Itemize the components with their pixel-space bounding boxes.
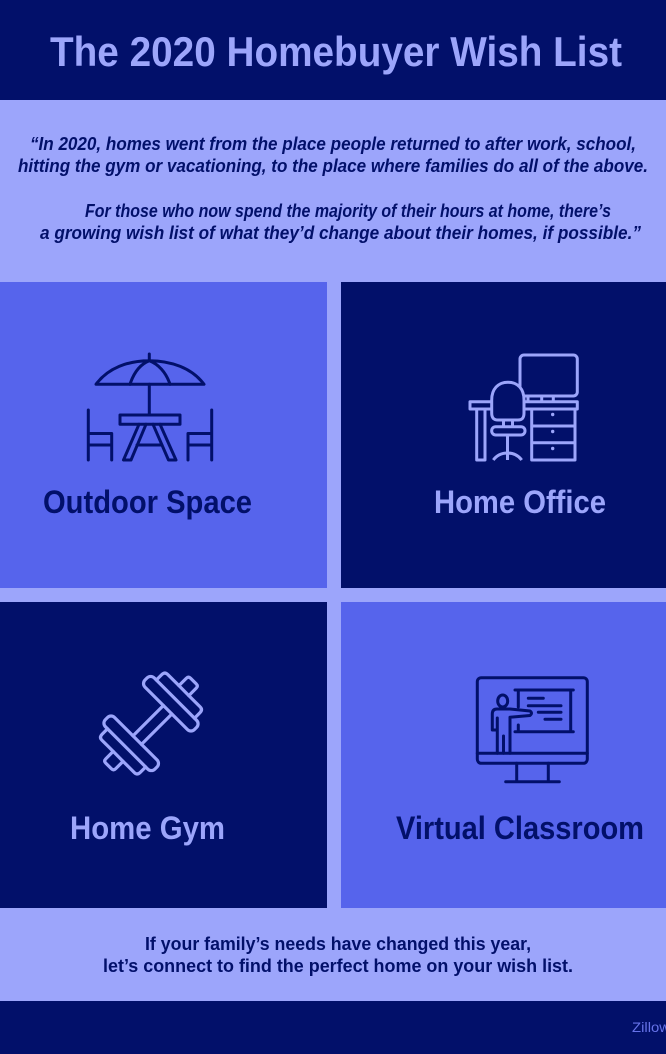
icon: dumbbell	[84, 656, 218, 791]
icon: teacher on computer screen	[477, 678, 587, 782]
label: home gym: Home Gym	[70, 810, 225, 846]
icon: desk, monitor and chair	[470, 355, 577, 460]
title: The 2020 Homebuyer Wish List	[50, 28, 622, 75]
label: outdoor space: Outdoor Space	[43, 484, 252, 520]
closing message: If your family’s needs have changed this year,	[145, 934, 531, 954]
intro quote	[18, 134, 648, 243]
intro quote: hitting the gym or vacationing, to the place where families do all of the above.	[18, 156, 648, 176]
intro quote: “In 2020, homes went from the place people returned to after work, school,	[30, 134, 636, 154]
header band with title	[0, 0, 666, 100]
panel: home office	[341, 282, 666, 588]
label: virtual classroom: Virtual Classroom	[396, 810, 644, 846]
closing message: let’s connect to find the perfect home on your wish list.	[103, 956, 573, 976]
intro quote: a growing wish list of what they’d change about their homes, if possible.”	[40, 223, 641, 243]
panel: virtual classroom	[341, 602, 666, 908]
intro quote: For those who now spend the majority of their hours at home, there’s	[85, 201, 611, 221]
closing message	[103, 934, 573, 976]
icon: patio table and umbrella	[88, 354, 212, 460]
footer band with source	[0, 1001, 666, 1054]
panel: outdoor space	[0, 282, 327, 588]
label: home office: Home Office	[434, 484, 606, 520]
panel: home gym	[0, 602, 327, 908]
